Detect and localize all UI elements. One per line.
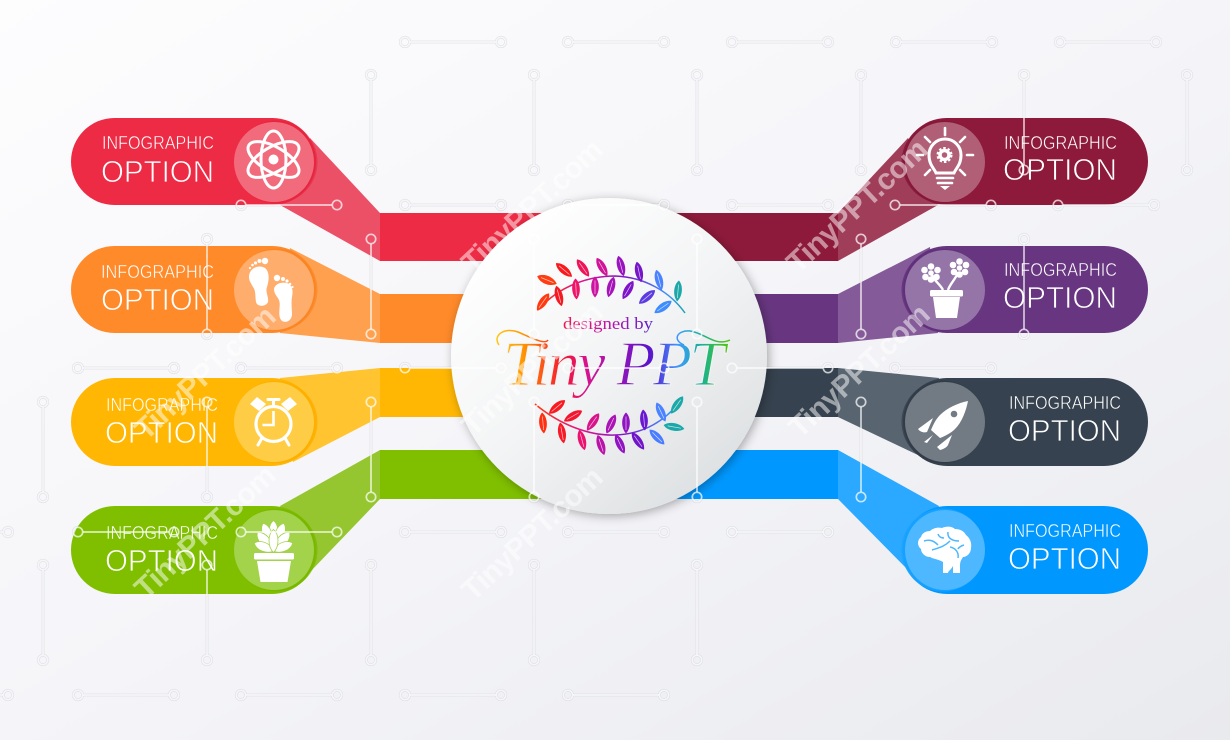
- pill: yellow option: OPTION: [105, 415, 218, 450]
- watermarks: TinyPPT.com: [128, 300, 283, 446]
- icon: brain: [918, 527, 971, 573]
- pill: blue option: [902, 506, 1148, 594]
- band: slate right: [740, 368, 939, 456]
- icon: alarm clock: [250, 397, 297, 445]
- pill: orange option: INFOGRAPHIC: [101, 262, 214, 282]
- logo: designed by: designed by: [563, 314, 654, 333]
- logo: TinyPPT script wordmark: Tiny PPT: [503, 328, 729, 399]
- pill: slate option: [902, 378, 1148, 466]
- pill: green option: INFOGRAPHIC: [106, 523, 218, 543]
- watermarks: TinyPPT.com: [455, 133, 610, 279]
- pill: orange option: [71, 246, 318, 333]
- icon: light bulb with gear: [917, 128, 973, 190]
- icon: succulent: [253, 521, 294, 582]
- band: purple right: [740, 247, 938, 343]
- pill: slate option: INFOGRAPHIC: [1009, 393, 1121, 413]
- pill: purple option: [902, 246, 1148, 333]
- icon: rocket: [918, 401, 968, 450]
- pill: purple option: INFOGRAPHIC: [1004, 260, 1117, 280]
- watermarks: [128, 133, 937, 607]
- icon: atom: [243, 131, 304, 188]
- watermarks: TinyPPT.com: [780, 133, 935, 279]
- logo: top wreath: [534, 255, 685, 316]
- band: yellow left: [280, 368, 480, 462]
- icon: footprints: [249, 258, 294, 322]
- band: red left: [280, 138, 550, 261]
- band: blue right: [670, 450, 939, 572]
- pill: blue option: OPTION: [1008, 541, 1121, 576]
- pill: maroon option: [902, 118, 1148, 205]
- pill: maroon option: OPTION: [1003, 152, 1117, 187]
- pill: blue option: INFOGRAPHIC: [1009, 521, 1121, 541]
- band: maroon right: [670, 138, 938, 261]
- pill: green option: OPTION: [105, 543, 218, 578]
- watermarks: TinyPPT.com: [455, 296, 610, 442]
- pill: red option: INFOGRAPHIC: [102, 133, 214, 153]
- pill: maroon option: INFOGRAPHIC: [1004, 133, 1117, 153]
- pill: green option: [71, 506, 318, 594]
- pill: red option: [71, 118, 318, 205]
- pill: yellow option: [71, 378, 318, 466]
- pill: red option: OPTION: [101, 154, 214, 189]
- pill: orange option: OPTION: [101, 282, 214, 317]
- pill: purple option: OPTION: [1003, 280, 1117, 315]
- logo: bottom wreath: [535, 394, 686, 456]
- pill: slate option: OPTION: [1008, 413, 1121, 448]
- watermarks: TinyPPT.com: [782, 298, 937, 444]
- watermarks: TinyPPT.com: [455, 461, 610, 607]
- watermarks: TinyPPT.com: [128, 459, 283, 605]
- icon: flower pot: [921, 258, 969, 318]
- centre disc: [451, 198, 767, 514]
- band: orange left: [280, 248, 480, 343]
- pill: yellow option: INFOGRAPHIC: [106, 395, 218, 415]
- band: green left: [280, 450, 550, 572]
